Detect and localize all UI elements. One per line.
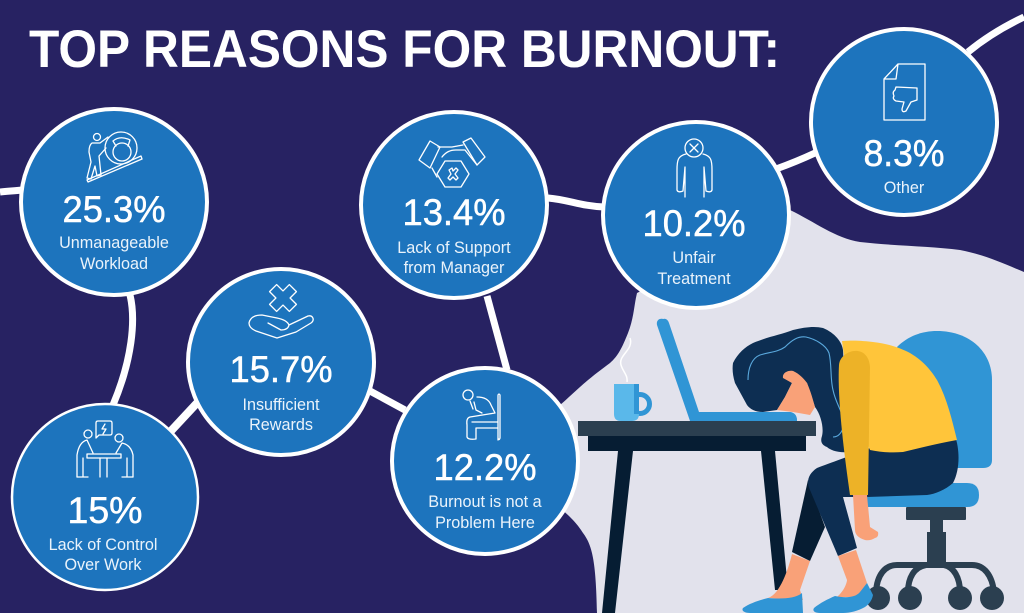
label: Lack of Control [49, 536, 157, 554]
value: 25.3% [62, 188, 166, 230]
label: Problem Here [435, 514, 535, 532]
label: Unmanageable [59, 234, 169, 252]
label: Other [884, 179, 925, 197]
light background blob [560, 210, 1024, 613]
chair back [897, 331, 992, 468]
value: 12.2% [434, 446, 536, 488]
icon: handshake with cross [419, 138, 485, 187]
hand [853, 495, 878, 540]
icon: two people at table [77, 421, 133, 477]
label: Insufficient [242, 396, 320, 414]
value: 13.4% [402, 191, 506, 233]
panel: burnout not a problem [392, 368, 578, 554]
label: Treatment [657, 270, 731, 288]
value: 15% [67, 489, 143, 531]
desk [578, 421, 816, 436]
panel: insufficient rewards [188, 269, 374, 455]
connecting line [0, 17, 1024, 432]
back leg [792, 480, 825, 561]
label: Workload [80, 255, 148, 273]
label: Unfair [672, 249, 716, 267]
label: Lack of Support [397, 239, 511, 257]
trousers [808, 436, 959, 556]
panel: other [811, 29, 997, 215]
hair highlight [748, 337, 844, 437]
label: Rewards [249, 416, 313, 434]
icon: person pushing weight [87, 132, 142, 182]
hair [733, 327, 848, 452]
value: 8.3% [864, 132, 944, 174]
desk illustration [578, 319, 1004, 613]
face [777, 371, 815, 415]
laptop [657, 319, 797, 421]
title: TOP REASONS FOR BURNOUT: [29, 20, 780, 79]
icon: person with cross [677, 139, 712, 197]
panel: lack of control [12, 404, 198, 590]
label: Burnout is not a [428, 493, 542, 511]
icon: person sitting [463, 390, 500, 440]
coffee mug [614, 338, 650, 421]
laptop base [690, 412, 797, 421]
desk legs [602, 451, 788, 613]
panel: unfair treatment [603, 122, 789, 308]
arm [839, 351, 870, 495]
value: 10.2% [642, 202, 746, 244]
value: 15.7% [230, 348, 332, 390]
panel: unmanageable workload [21, 109, 207, 295]
label: from Manager [404, 259, 505, 277]
chair seat [867, 483, 979, 507]
back shin [768, 554, 810, 600]
icon: document thumbs down [884, 64, 925, 120]
panel: lack of support [361, 112, 547, 298]
label: Over Work [64, 556, 142, 574]
front shin [837, 550, 867, 597]
front shoe [813, 583, 873, 613]
icon: hand with cross [249, 278, 313, 338]
chair base [866, 507, 1004, 610]
back shoe [742, 593, 803, 613]
torso [842, 341, 957, 452]
